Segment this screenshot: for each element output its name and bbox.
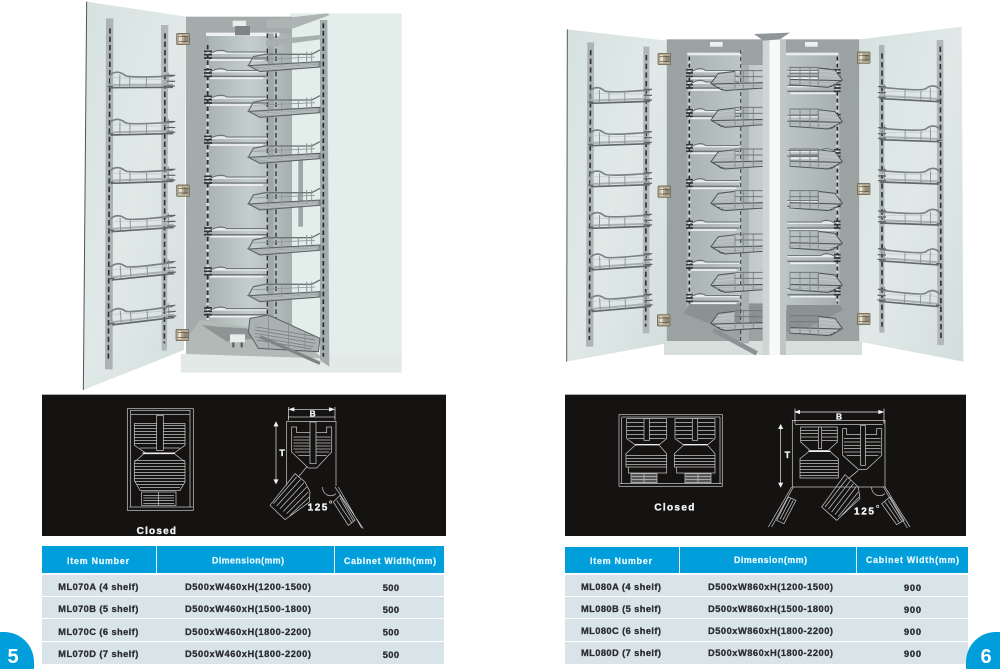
- dimension arrows: [274, 407, 335, 484]
- open door with racks: [83, 2, 186, 390]
- drawing: open plan: [768, 420, 910, 528]
- data row ML070D: 500: [383, 650, 399, 660]
- photo: single-door pantry cabinet: [83, 2, 402, 390]
- pull-out frame and baskets: [248, 13, 330, 367]
- data row ML070A: D500xW460xH(1200-1500): [185, 582, 311, 592]
- panel background: [565, 395, 966, 536]
- cabinet interior: [186, 17, 323, 358]
- data row ML070B: ML070B (5 shelf): [58, 604, 138, 614]
- page number 6: 6: [980, 646, 992, 668]
- data row ML080C: ML080C (6 shelf): [581, 626, 661, 636]
- data row ML080B: ML080B (5 shelf): [581, 604, 661, 614]
- data row ML080A: 900: [904, 583, 921, 593]
- data row ML080B: 900: [904, 605, 921, 615]
- right door with racks: [859, 27, 963, 362]
- header row: [42, 546, 444, 573]
- data row ML080C: D500xW860xH(1800-2200): [708, 626, 833, 636]
- drawing: closed plan: [619, 415, 722, 486]
- cabinet base: [664, 340, 862, 355]
- header row: Cabinet Width(mm): [866, 555, 959, 565]
- data row ML070A: 500: [383, 583, 399, 593]
- drawing: closed plan: [127, 409, 193, 510]
- page number 5: [0, 632, 34, 669]
- page number 6: [966, 632, 1000, 669]
- data row ML080B: D500xW860xH(1500-1800): [708, 604, 833, 614]
- dimension labels: T: [785, 450, 791, 460]
- data row ML070B: [42, 597, 444, 618]
- data row ML070C: D500xW460xH(1800-2200): [185, 627, 311, 637]
- page number 5: 5: [7, 646, 19, 668]
- dimension labels: [785, 411, 879, 518]
- central pull-out posts: [742, 33, 790, 355]
- data row ML080D: 900: [904, 649, 921, 659]
- data row ML080A: [565, 575, 968, 596]
- carousel base: [202, 325, 257, 347]
- dimension labels: 125: [854, 507, 874, 518]
- cabinet side wall: [181, 13, 402, 373]
- header row: Cabinet Width(mm): [344, 556, 436, 566]
- pull handle: [298, 160, 303, 227]
- data row ML070C: 500: [383, 628, 399, 638]
- data row ML070B: 500: [383, 605, 399, 615]
- hinges: [657, 52, 870, 326]
- data row ML070A: [42, 575, 444, 596]
- data row ML080D: [565, 642, 968, 664]
- panel background: [42, 395, 446, 536]
- data row ML070C: ML070C (6 shelf): [58, 627, 138, 637]
- interior rails and shelves: [686, 50, 841, 343]
- data row ML080B: [565, 597, 968, 618]
- dimension labels: [279, 409, 332, 514]
- hinges: [176, 33, 189, 341]
- data row ML080A: D500xW860xH(1200-1500): [708, 582, 833, 592]
- data row ML070B: D500xW460xH(1500-1800): [185, 604, 311, 614]
- drawing: open plan: [270, 417, 363, 529]
- pull-out baskets: [711, 67, 842, 353]
- diagram panel: ML070: [42, 395, 446, 537]
- dimension labels: B: [836, 411, 842, 421]
- table: ML070 specifications: [42, 546, 444, 664]
- left door with racks: [567, 29, 667, 362]
- data row ML080A: ML080A (4 shelf): [581, 582, 661, 592]
- dimension labels: B: [310, 409, 316, 419]
- header row: Dimension(mm): [212, 556, 284, 566]
- table: ML080 specifications: [565, 547, 968, 664]
- data row ML080C: [565, 619, 968, 641]
- photo: double-door pantry cabinet: [567, 27, 963, 362]
- dimension labels: 125: [308, 503, 328, 514]
- data row ML070C: [42, 619, 444, 641]
- header row: Item Number: [67, 556, 130, 566]
- data row ML080C: 900: [904, 627, 921, 637]
- data row ML070D: ML070D (7 shelf): [58, 649, 138, 659]
- cabinet interior: [667, 39, 859, 341]
- data row ML070A: ML070A (4 shelf): [58, 582, 138, 592]
- label: Closed: Closed: [137, 526, 176, 537]
- header row: [565, 547, 968, 573]
- diagram panel: ML080: [565, 395, 966, 536]
- header row: Item Number: [590, 556, 653, 566]
- dimension labels: T: [279, 448, 285, 458]
- data row ML070D: D500xW460xH(1800-2200): [185, 649, 311, 659]
- interior fixed rail and shelves: [204, 33, 276, 347]
- data row ML080D: D500xW860xH(1800-2200): [708, 648, 833, 658]
- header row: Dimension(mm): [734, 555, 807, 565]
- dimension arrows: [779, 409, 884, 487]
- data row ML070D: [42, 642, 444, 664]
- data row ML080D: ML080D (7 shelf): [581, 648, 661, 658]
- label: Closed: Closed: [654, 503, 694, 514]
